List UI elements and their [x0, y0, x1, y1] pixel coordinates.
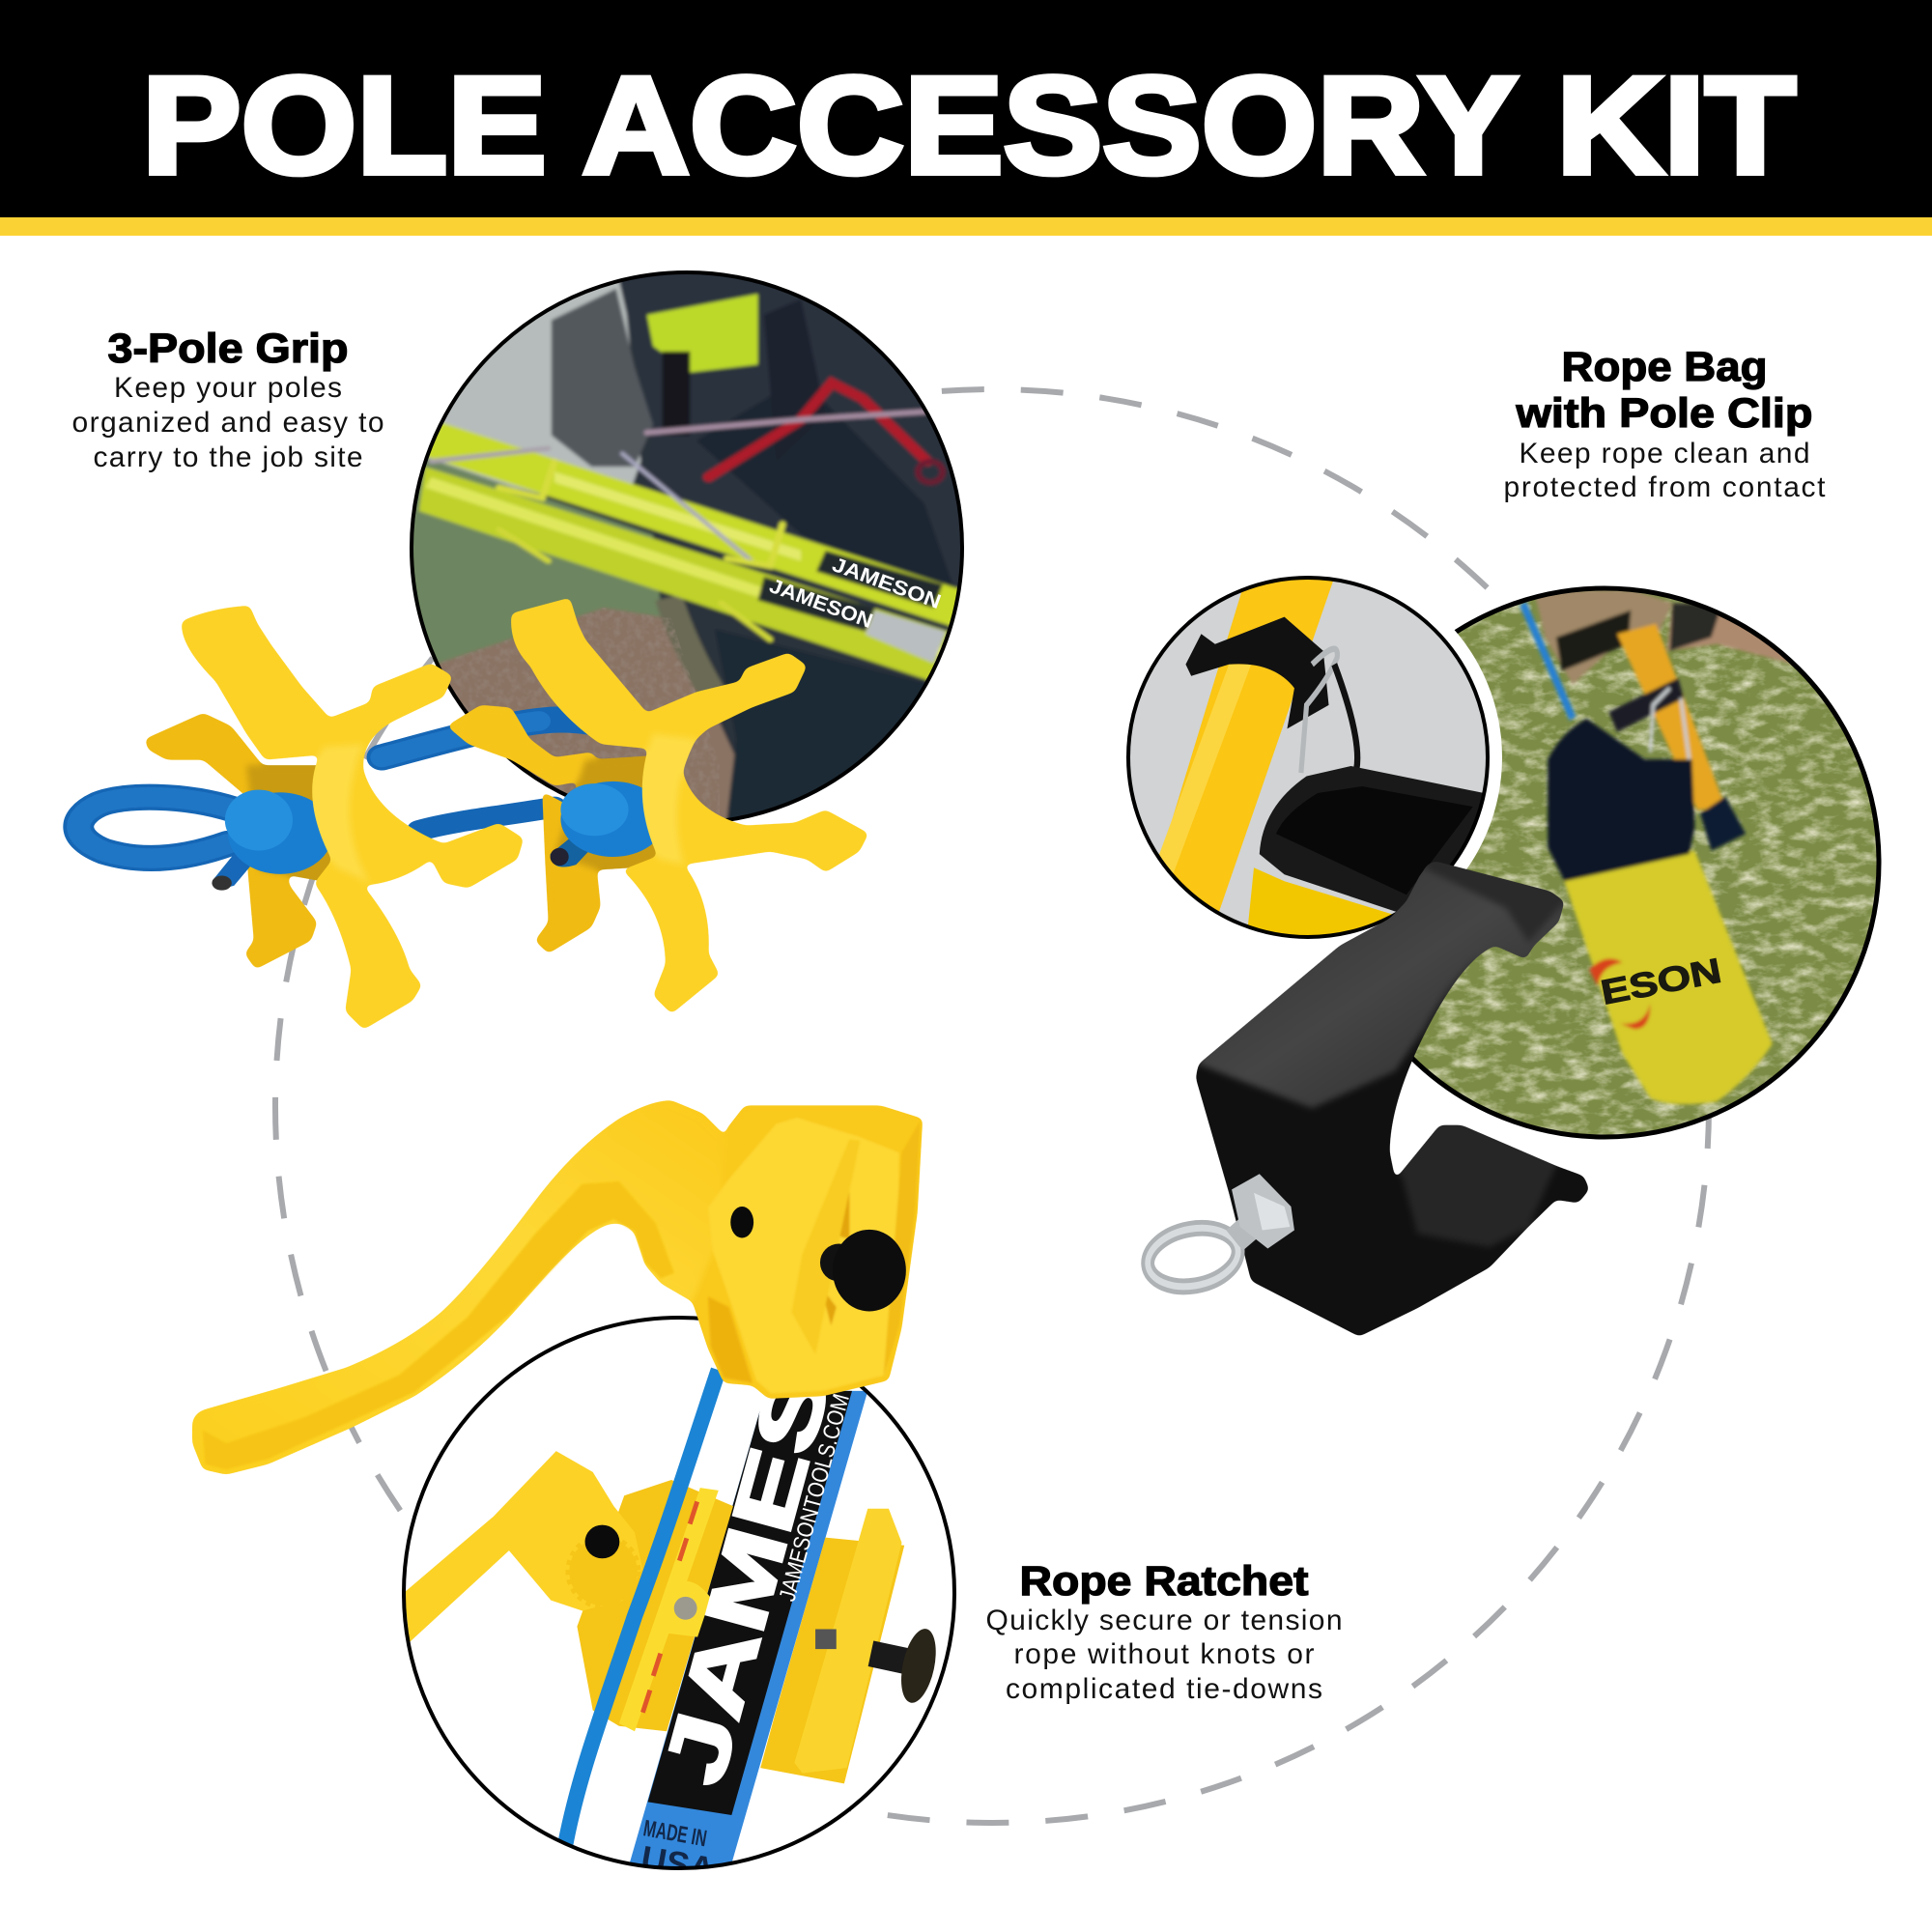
ratchet lever [405, 1451, 642, 1642]
text block: Rope Bag with Pole Clip [1503, 344, 1826, 503]
photo: workers carrying poles with grips [406, 268, 967, 870]
photo: workers carrying poles with grips: JAMESON [829, 554, 944, 613]
grip: left front [182, 606, 524, 1030]
dashed connecting circle [275, 389, 1709, 1823]
clamp body [693, 1105, 923, 1399]
text block: 3-Pole Grip: Keep your poles [114, 372, 342, 404]
grip: right front [511, 598, 868, 1014]
rope loop [78, 720, 616, 859]
text block: Rope Ratchet: rope without knots or [1014, 1638, 1314, 1670]
knot: left [212, 790, 332, 891]
eye bolt [1145, 1174, 1294, 1293]
rope [564, 1370, 719, 1852]
heading: 3-Pole Grip: 3-Pole Grip [108, 326, 348, 372]
label on bag: ESON [1598, 951, 1724, 1012]
photo: workers carrying poles with grips: JAMESON [766, 575, 875, 633]
product: yellow rope ratchet lever [192, 1100, 923, 1475]
heading: Rope Ratchet: Rope Ratchet [1020, 1558, 1308, 1605]
grip: left back arms [145, 713, 345, 970]
text block: Rope Ratchet: Quickly secure or tension [985, 1605, 1343, 1636]
product: two 3-pole grips on blue rope [78, 598, 868, 1030]
photo: rope ratchet on pole: USA [639, 1838, 718, 1889]
tension knob [820, 1230, 906, 1311]
text block: 3-Pole Grip: organized and easy to [71, 407, 384, 439]
text block: 3-Pole Grip: carry to the job site [93, 441, 363, 473]
knot: right [551, 781, 666, 867]
back plate [577, 1480, 733, 1731]
clamp and lever shading [203, 1118, 920, 1469]
photo: rope ratchet on pole: JAMESONTOOLS.COM [775, 1391, 855, 1605]
heading: Rope Bag: Rope Bag [1561, 344, 1768, 390]
product: black pole clip with eye bolt [1145, 861, 1589, 1337]
photo: bag clipped to pole on grass [1412, 585, 1882, 1140]
clip body [1196, 861, 1589, 1337]
text block: Rope Bag with Pole Clip: protected from contact [1503, 471, 1826, 503]
title: POLE ACCESSORY KIT [142, 49, 1796, 203]
pivot hole [730, 1207, 753, 1238]
header banner [0, 0, 1932, 236]
pole [627, 1391, 867, 1873]
lever [192, 1100, 745, 1475]
pole branding: JAMES [645, 1358, 849, 1794]
text block: Rope Ratchet [985, 1558, 1343, 1705]
text block: 3-Pole Grip [71, 326, 384, 473]
photo: rope ratchet on pole [404, 1318, 954, 1889]
strap with slots [619, 1488, 719, 1731]
text block: Rope Bag with Pole Clip: Keep rope clean and [1519, 438, 1810, 469]
tensioning bolt [867, 1640, 908, 1673]
photo: rope ratchet on pole: MADE IN [641, 1815, 709, 1852]
text block: Rope Bag with Pole Clip: with Pole Clip [1515, 390, 1812, 437]
text block: Rope Ratchet: complicated tie-downs [1006, 1673, 1322, 1705]
grip: right back arms [446, 705, 684, 953]
photo: close-up of pole clip and bag [1114, 563, 1502, 952]
